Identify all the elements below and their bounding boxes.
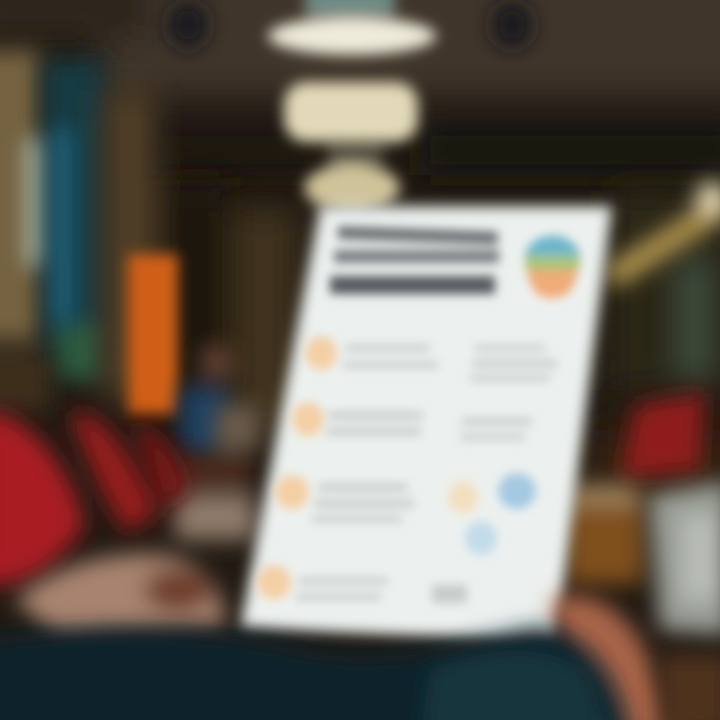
amber drink glass (566, 484, 644, 584)
table corner bottom right (660, 655, 720, 720)
background person (180, 344, 235, 453)
foreground shoulder (0, 628, 630, 720)
table area (175, 405, 260, 540)
sheet blue icons (465, 473, 536, 555)
sheet body text right (432, 345, 557, 603)
red chair right (620, 392, 705, 478)
ceiling spotlights (168, 1, 532, 49)
red chairs left (0, 410, 188, 586)
sheet item row icons (257, 336, 478, 599)
paper (240, 206, 612, 642)
hand holding sheet left (15, 553, 225, 640)
sheet body text left (296, 345, 438, 600)
teal column (44, 60, 104, 380)
sheet logo icon (525, 236, 580, 298)
clear water glass (648, 480, 720, 635)
printed infographic sheet (240, 206, 612, 642)
string of lights (610, 182, 720, 278)
ceiling (0, 0, 720, 175)
hanging lamp (268, 0, 436, 212)
hand holding sheet right (550, 596, 670, 720)
background: cafe interior (0, 0, 720, 540)
brown wall panel (105, 90, 297, 430)
sheet title (330, 226, 499, 294)
right background (590, 190, 720, 490)
left wall (0, 50, 50, 410)
orange panel (128, 254, 178, 414)
